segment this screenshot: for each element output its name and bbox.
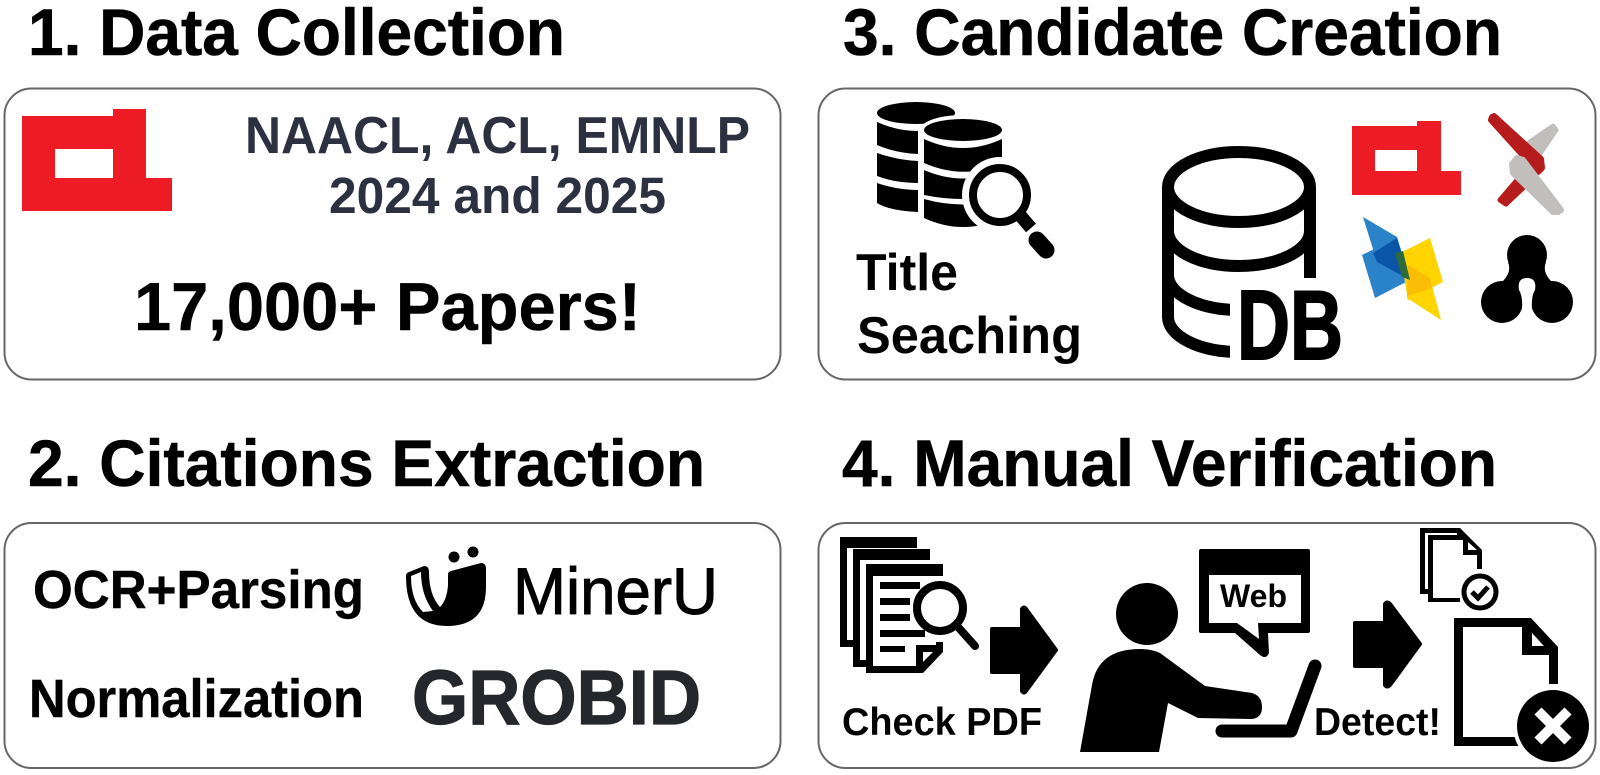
icon: database DB: DB <box>1237 270 1343 380</box>
icon: rejected document <box>1454 618 1593 766</box>
arrow: check to person <box>992 608 1056 692</box>
icon: MinerU logo <box>406 546 486 626</box>
icon: blue and yellow logo <box>1362 217 1443 320</box>
text: OCR+Parsing: OCR+Parsing <box>33 560 364 620</box>
panel: manual verification <box>818 523 1596 768</box>
title: 2. Citations Extraction: 2. Citations Extraction <box>28 426 705 500</box>
icon: database DB <box>1168 152 1343 380</box>
title: 4. Manual Verification: 4. Manual Verification <box>842 426 1497 500</box>
text: Check PDF: Check PDF <box>842 701 1042 744</box>
icon: web speech bubble <box>1199 549 1310 657</box>
panel: data collection <box>4 88 780 380</box>
panel: candidate creation <box>818 88 1596 380</box>
icon: red ACL logo <box>22 109 172 211</box>
text: Detect!: Detect! <box>1314 701 1441 744</box>
icon: three-lobed black logo <box>1481 235 1573 323</box>
text: Title Seaching: Seaching <box>857 307 1082 365</box>
arrow: person to detection <box>1355 602 1420 686</box>
text: paper count: 17,000+ Papers! <box>134 269 641 345</box>
icon: person at laptop <box>1080 583 1315 752</box>
icon: PDF pages with magnifier <box>840 537 975 673</box>
icon: red ACL logo small <box>1352 121 1461 195</box>
icon: crossed bars logo <box>1491 116 1561 212</box>
text: Title Seaching: Title <box>856 244 958 302</box>
text: Title Seaching <box>856 244 1082 365</box>
text: conferences: NAACL, ACL, EMNLP <box>245 107 750 165</box>
icon: verified document <box>1420 528 1501 613</box>
icon: web speech bubble: Web <box>1220 578 1287 614</box>
text: MinerU: MinerU <box>513 554 718 628</box>
text: GROBID: GROBID <box>412 655 701 741</box>
icon: title search databases <box>877 102 1046 250</box>
text: Normalization: Normalization <box>29 669 364 729</box>
panel: citations extraction <box>4 523 780 768</box>
text: years: 2024 and 2025 <box>329 167 666 224</box>
